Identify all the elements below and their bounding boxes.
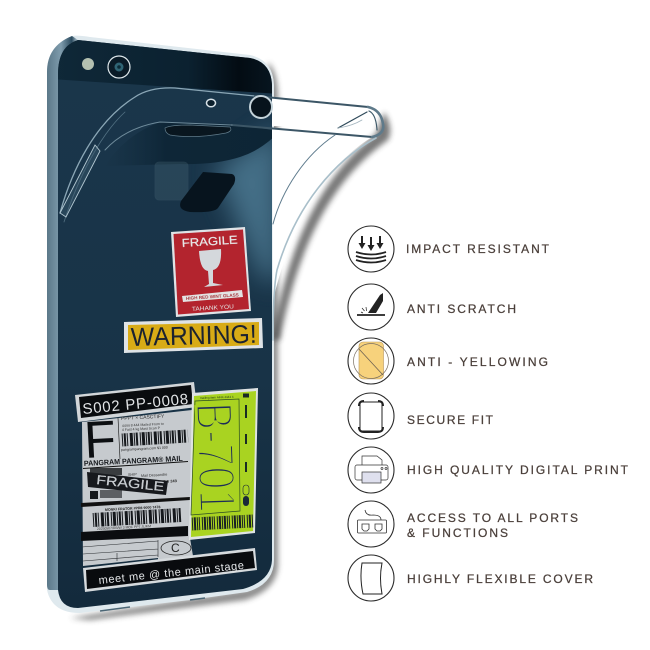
flap edge strokes (60, 88, 383, 340)
fingerprint cutout square (155, 162, 188, 200)
sticker: meet me: meet me @ the main stage (98, 560, 245, 587)
thank you: TAHANK YOU (192, 304, 234, 313)
barcode footer: 20250507/RB/W 3 MOF PP7 JL/KM (97, 524, 151, 531)
label: HIGH QUALITY DIGITAL PRINT (407, 463, 629, 477)
phone back (58, 40, 272, 608)
yellow panel (128, 322, 259, 350)
red panel (174, 230, 249, 314)
icon: bent cover (361, 563, 382, 594)
C badge: C (171, 541, 180, 555)
ship to text: SHIP (128, 473, 137, 477)
address lines: PPPT × CASCTIFY (121, 414, 165, 422)
feature: digital print (348, 447, 629, 493)
small top text: mailing item 4444 4444 4 (200, 395, 234, 400)
fragile heading: FRAGILE (181, 234, 238, 250)
middle barcode (93, 515, 181, 520)
big F: F (83, 410, 117, 470)
sticker: S002 PP-0008 (75, 382, 197, 422)
middle barcode caption: MONKI FRATOR #PR8 9000 7478 (105, 505, 161, 512)
sticker: S002 PP-0008: S002 PP-0008 (82, 391, 189, 418)
icon: blade scratching surface (357, 293, 385, 315)
case bottom highlights (100, 598, 205, 611)
warning text: WARNING! (130, 319, 257, 352)
case camera cutout (250, 96, 272, 118)
feature: secure fit (348, 393, 494, 439)
camera lens (108, 56, 130, 78)
case flash hole (206, 99, 216, 107)
shipping label: 4 Fast 4 kg Mast Scan P (122, 426, 161, 432)
label: IMPACT RESISTANT (406, 242, 550, 256)
top barcode (122, 436, 188, 440)
qr block (90, 468, 122, 499)
light sheen and shading (50, 30, 280, 280)
label: SECURE FIT (407, 413, 494, 427)
case flap shadow (272, 112, 390, 340)
shipping label: NGW 24B (160, 479, 178, 484)
B-701: B-701 (184, 401, 246, 513)
icon: yellow case crossed (354, 342, 388, 379)
vertical divider (118, 418, 120, 459)
sticker: warning (124, 318, 263, 353)
bar below heading (83, 461, 188, 469)
glass note (182, 290, 243, 302)
fragile stamp (87, 472, 168, 495)
icon: printer (355, 456, 388, 483)
metal left edge (47, 36, 78, 590)
shipping label: 4444 8 444 Mailed From to (122, 422, 164, 428)
phone with clear case (47, 30, 390, 620)
label sheet (82, 410, 193, 566)
rim opening (272, 98, 367, 127)
label: ACCESS TO ALL PORTS (407, 511, 578, 525)
case side button (60, 145, 100, 217)
label: ANTI - YELLOWING (407, 355, 548, 369)
note text: HIGH RED WINT GLASS (186, 292, 239, 301)
label: & FUNCTIONS (407, 526, 508, 540)
shipping label: FRAGILE (96, 472, 165, 494)
sticker: meet me (83, 548, 257, 592)
black bar middle (81, 497, 190, 507)
case speaker slot (165, 125, 231, 137)
form table (82, 540, 158, 561)
green barcode (192, 521, 253, 524)
phone outer case rim (47, 36, 274, 613)
feature: anti scratch (348, 284, 516, 330)
feature: ports (348, 501, 578, 547)
fingerprint sensor (180, 172, 235, 212)
C badge (161, 541, 191, 555)
phone shadow (70, 62, 278, 620)
shipping label: Mail Dessandre (141, 473, 167, 478)
camera band (58, 40, 272, 94)
black bar lower (81, 526, 188, 541)
shadow area under flap (137, 122, 272, 165)
flash (82, 58, 94, 70)
icon: case outline (359, 401, 383, 432)
label (407, 511, 578, 540)
label: HIGHLY FLEXIBLE COVER (407, 572, 593, 586)
barcode caption: pangrampangram.com $1 000 (121, 446, 168, 452)
sticker: green B-701 (184, 388, 258, 540)
sticker: fragile (171, 227, 251, 317)
broken glass icon (199, 249, 223, 287)
label: ANTI SCRATCH (407, 302, 516, 316)
feature: impact resistant (348, 226, 550, 272)
feature: flexible cover (348, 555, 593, 601)
feature: anti yellowing (348, 338, 548, 384)
icon: ports (358, 510, 386, 533)
mail heading: PANGRAM PANGRAM® MAIL (84, 454, 183, 468)
side badge (243, 485, 249, 506)
side marks (243, 394, 249, 472)
right sheen (215, 125, 280, 280)
icon: arrows and layers (356, 236, 386, 262)
shipping label (81, 410, 193, 566)
inner frame (191, 399, 240, 515)
clear flap white area (272, 129, 372, 300)
